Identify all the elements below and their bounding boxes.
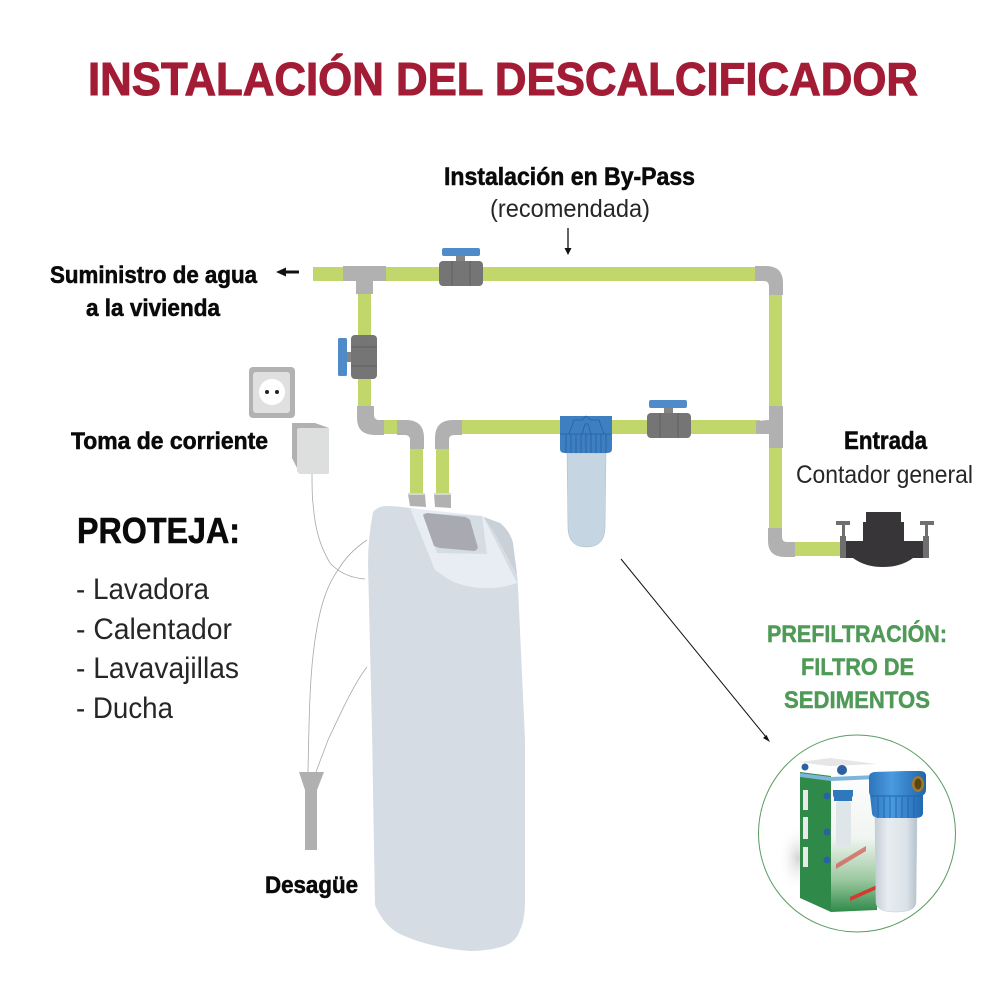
filter bowl (875, 817, 917, 912)
label: water supply to house (50, 262, 258, 322)
list: protected appliances: - Calentador (76, 613, 232, 646)
shadow (778, 824, 818, 892)
icon: wall socket (249, 367, 295, 418)
valve: vertical (338, 335, 377, 379)
label: by-pass installation: Instalación en By-Pass (444, 163, 695, 191)
label: by-pass installation (444, 163, 695, 223)
label: drain: Desagüe (265, 872, 358, 899)
wires (308, 474, 367, 772)
softener lid (410, 508, 517, 588)
water meter (836, 512, 934, 567)
filter brass port (912, 776, 924, 792)
product circle (758, 735, 956, 932)
icon: drain (299, 772, 324, 850)
label: power socket: Toma de corriente (71, 428, 268, 455)
valve: top by-pass (439, 248, 483, 286)
water softener (368, 506, 525, 951)
label: water supply to house: a la vivienda (86, 295, 221, 322)
icon: power adapter (292, 423, 329, 474)
softener display (423, 513, 478, 551)
heading: protect: PROTEJA: (77, 510, 240, 551)
softener body (368, 506, 525, 951)
product photo: filter and box (758, 735, 956, 932)
label: by-pass installation: (recomendada) (490, 195, 650, 223)
valve: inlet (647, 400, 691, 438)
arrow: by-pass down (564, 228, 572, 255)
sediment filter (560, 416, 612, 547)
pipe network (313, 266, 845, 557)
filter cap (869, 771, 926, 818)
list: protected appliances: - Lavavajillas (76, 652, 239, 685)
filter bowl (567, 453, 606, 547)
list: protected appliances: - Ducha (76, 692, 173, 725)
heading: prefiltration: FILTRO DE (801, 654, 914, 681)
heading: prefiltration (767, 620, 947, 714)
heading: prefiltration: SEDIMENTOS (784, 687, 930, 714)
filter cap (560, 416, 612, 453)
grey fittings (343, 266, 795, 557)
box (800, 762, 831, 912)
arrow: supply outgoing (276, 268, 299, 276)
list: protected appliances (76, 573, 239, 725)
heading: prefiltration: PREFILTRACIÓN: (767, 620, 947, 648)
label: meter inlet: Contador general (796, 461, 973, 489)
arrow: filter to product (621, 559, 770, 742)
title: INSTALACIÓN DEL DESCALCIFICADOR (88, 53, 918, 105)
label: water supply to house: Suministro de agua (50, 262, 258, 289)
list: protected appliances: - Lavadora (76, 573, 209, 606)
green pipes (313, 267, 845, 556)
label: meter inlet: Entrada (844, 427, 928, 455)
label: meter inlet (796, 427, 973, 489)
